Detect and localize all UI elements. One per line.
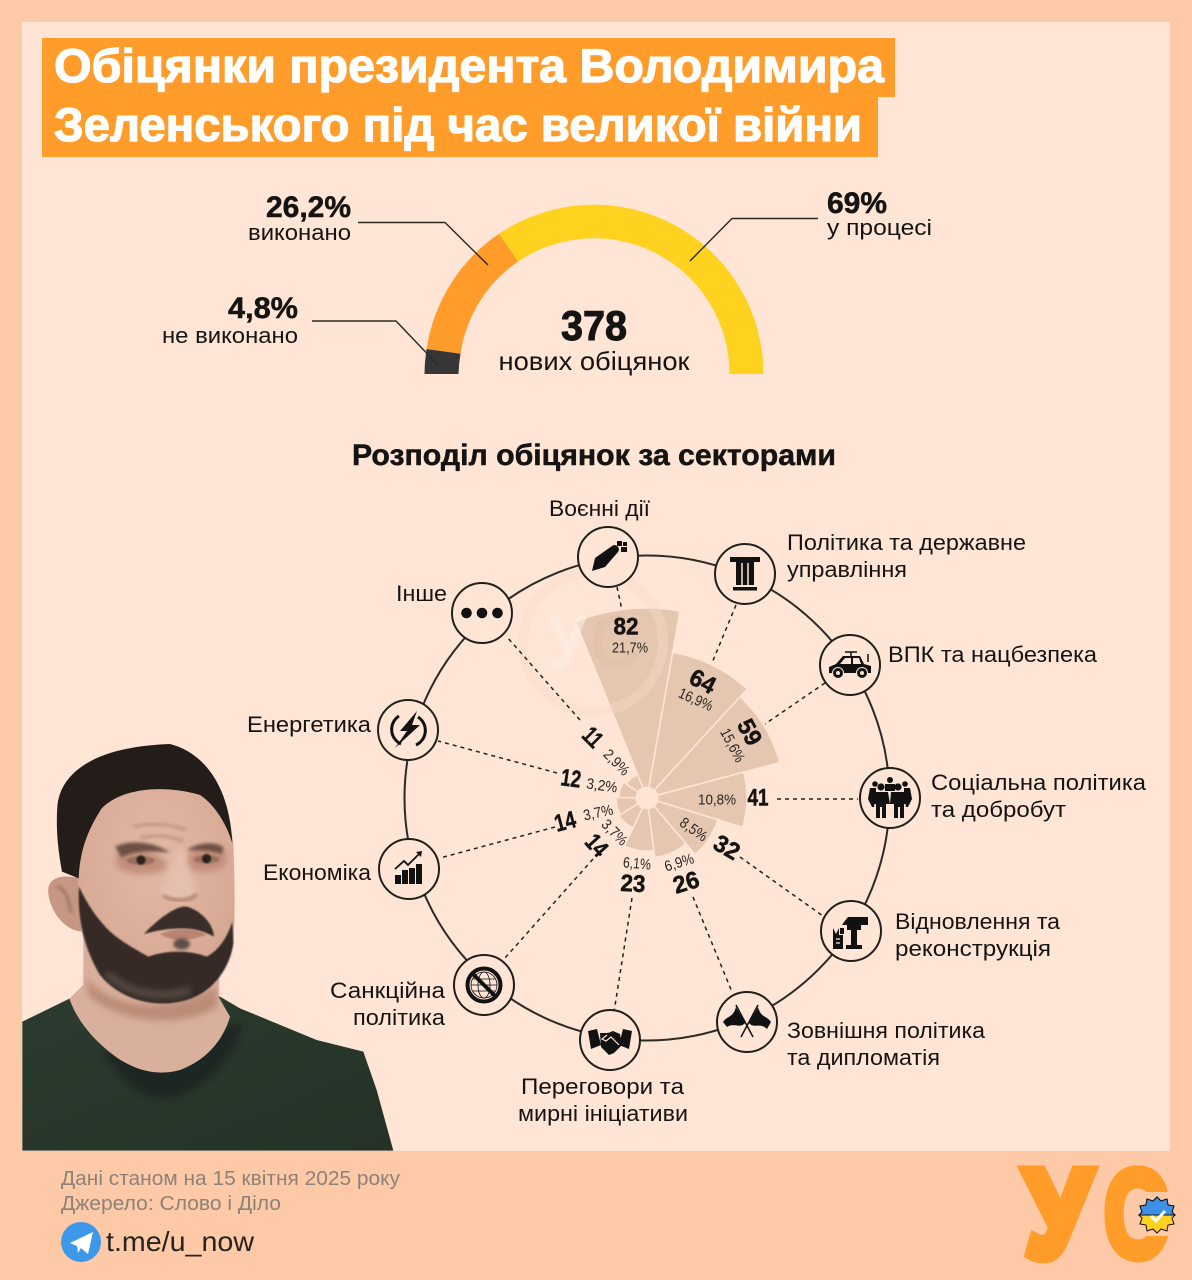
value: energy 12: 3,2% (585, 775, 618, 797)
value: defence 59 (716, 715, 767, 765)
label: negotiations (518, 1074, 688, 1126)
footer note: Дані станом на 15 квітня 2025 року (61, 1168, 400, 1190)
value: politics 64: 64 (685, 664, 721, 700)
portrait: beard (79, 887, 233, 1003)
label: negotiations: мирні ініціативи (518, 1101, 688, 1126)
portrait (22, 744, 393, 1151)
label: sanctions: політика (353, 1005, 446, 1030)
watermark stamp (523, 572, 663, 712)
label: sanctions: Санкційна (330, 978, 446, 1003)
gauge segment: not done (424, 349, 460, 374)
value: energy 12 (559, 764, 618, 797)
portrait: face (78, 780, 235, 1002)
value: military 82: 21,7% (612, 640, 648, 656)
icon: pencil bomb (military) (578, 527, 638, 587)
polar bar chart (576, 608, 780, 858)
watermark stamp: С (590, 600, 640, 685)
callout: not done 4.8%: не виконано (162, 323, 298, 348)
label: diplomacy: та дипломатія (787, 1045, 940, 1070)
label: social: Соціальна політика (931, 770, 1147, 795)
icon: crossed flags (diplomacy) (717, 992, 777, 1052)
value: economy 14 (552, 802, 615, 838)
value: other 11: 11 (576, 722, 608, 754)
gauge centre total: нових обіцянок (498, 346, 690, 376)
value: sanctions 14: 14 (579, 829, 614, 863)
value: politics 64: 16,9% (676, 685, 715, 715)
label: negotiations: Переговори та (521, 1074, 685, 1099)
dashed connectors (438, 587, 858, 1012)
value: economy 14: 3,7% (582, 802, 615, 824)
label: diplomacy (787, 1018, 986, 1070)
label: military: Воєнні дії (549, 496, 650, 521)
value: politics 64 (676, 664, 721, 715)
callout: done 26.2%: 26,2% (266, 191, 351, 224)
value: economy 14: 14 (552, 806, 579, 838)
portrait: moustache (144, 907, 214, 937)
label: reconstruction: Відновлення та (895, 909, 1061, 934)
title (42, 38, 895, 157)
portrait: ear (48, 876, 82, 932)
callout: done 26.2%: виконано (248, 220, 351, 245)
icon: telegram (61, 1222, 101, 1262)
label: other: Інше (396, 581, 447, 606)
value: energy 12: 12 (559, 764, 583, 794)
gauge chart (424, 205, 764, 376)
value: reconstruction 32: 8,5% (676, 814, 711, 845)
portrait: eyebrows (115, 842, 170, 857)
icon: crane (reconstruction) (821, 901, 881, 961)
icon: energy bolt (378, 700, 438, 760)
portrait: eye sockets (117, 847, 227, 874)
label: energy: Енергетика (247, 712, 372, 737)
watermark stamp: У (547, 600, 588, 685)
label: reconstruction: реконструкція (895, 936, 1051, 961)
portrait: nose (161, 850, 197, 901)
icon: verified badge (1139, 1197, 1175, 1233)
footer note: Джерело: Слово і Діло (61, 1193, 281, 1215)
value: sanctions 14: 3,7% (598, 816, 631, 849)
value: military 82: 82 (614, 614, 638, 640)
logo: У (1026, 1146, 1092, 1280)
value: negotiations 23 (620, 854, 652, 898)
icon: growth chart (economy) (379, 839, 439, 899)
value: negotiations 23: 6,1% (622, 854, 652, 874)
label: diplomacy: Зовнішня політика (787, 1018, 986, 1043)
label: reconstruction (895, 909, 1061, 961)
callout: not done 4.8%: 4,8% (228, 292, 298, 325)
value: other 11 (576, 722, 633, 779)
icon: columns (politics) (715, 544, 775, 604)
title: Зеленського під час великої війни (54, 98, 862, 151)
gauge centre total (498, 302, 690, 376)
value: diplomacy 26: 26 (670, 866, 703, 900)
label: social: та добробут (931, 797, 1066, 822)
values on chart (552, 614, 768, 900)
value: diplomacy 26: 6,9% (662, 850, 696, 875)
title: Обіцянки президента Володимира (54, 39, 885, 92)
label: economy: Економіка (263, 860, 372, 885)
value: social 41: 41 (748, 784, 768, 812)
value: reconstruction 32 (676, 814, 745, 866)
portrait: lips (160, 929, 207, 940)
value: diplomacy 26 (662, 850, 703, 900)
value: negotiations 23: 23 (620, 870, 646, 898)
callout: in progress 69% (690, 187, 932, 261)
value: social 41 (698, 784, 768, 812)
value: military 82 (612, 614, 648, 656)
icon: handshake (negotiations) (580, 1010, 640, 1070)
gauge segment: in progress (499, 205, 764, 374)
label: social (931, 770, 1147, 822)
sector heading: Розподіл обіцянок за секторами (352, 439, 836, 472)
telegram link (61, 1222, 255, 1262)
footer note (61, 1168, 400, 1215)
value: defence 59: 59 (731, 715, 767, 750)
portrait: hair (57, 744, 232, 878)
label: defence: ВПК та нацбезпека (888, 642, 1098, 667)
callout: in progress 69%: у процесі (827, 215, 932, 240)
value: other 11: 2,9% (600, 746, 633, 779)
label: politics: Політика та державне (787, 530, 1026, 555)
portrait: neck (69, 930, 230, 1073)
icon: three dots (other) (452, 583, 512, 643)
callout: not done 4.8% (162, 292, 438, 365)
outer ring (404, 556, 890, 1040)
icon: armoured car (defence) (820, 635, 880, 695)
gauge segment: done (427, 234, 518, 354)
portrait: forehead creases (133, 824, 187, 842)
gauge centre total: 378 (561, 302, 627, 349)
value: defence 59: 15,6% (716, 726, 748, 765)
label: sanctions (330, 978, 446, 1030)
portrait: shirt (22, 997, 393, 1151)
logo (1026, 1146, 1178, 1280)
callout: done 26.2% (248, 191, 488, 265)
value: social 41: 10,8% (698, 792, 736, 808)
value: sanctions 14 (579, 816, 631, 863)
icon: crossed globe (sanctions) (454, 955, 514, 1015)
label: politics: управління (787, 557, 907, 582)
label: politics (787, 530, 1026, 582)
portrait: eyes (127, 856, 155, 865)
callout: in progress 69%: 69% (827, 187, 887, 220)
telegram link: t.me/u_now (106, 1226, 255, 1257)
value: reconstruction 32: 32 (708, 830, 745, 866)
icon: people (social policy) (860, 768, 920, 828)
